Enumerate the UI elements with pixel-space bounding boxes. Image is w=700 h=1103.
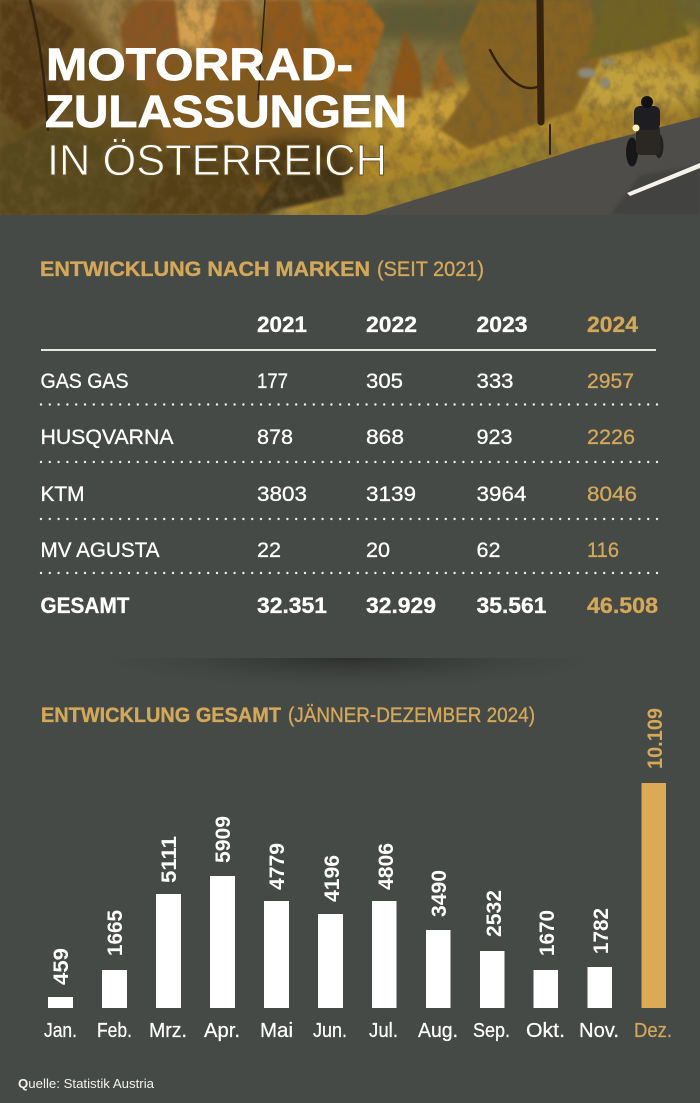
month labels: Sep. — [473, 1020, 510, 1042]
heading: brands: ENTWICKLUNG NACH MARKEN — [40, 258, 370, 281]
section shadow — [70, 658, 630, 692]
row: Gesamt: 32.351 — [257, 593, 327, 618]
row: KTM — [40, 483, 637, 506]
row: MV Agusta: 22 — [257, 539, 281, 562]
brand table — [40, 312, 658, 618]
month labels: Nov. — [579, 1020, 619, 1042]
month labels: Jan. — [44, 1020, 77, 1042]
motorcyclist — [626, 96, 664, 166]
table header years: 2022 — [366, 312, 417, 337]
row: MV Agusta: 62 — [476, 539, 500, 562]
month labels: Okt. — [526, 1020, 565, 1042]
bar values: 3490 — [428, 870, 451, 917]
row: Husqvarna: 2226 — [587, 426, 635, 449]
row: Gas Gas: GAS GAS — [40, 370, 128, 393]
bar values: 1670 — [536, 910, 559, 956]
bar values: 459 — [50, 948, 73, 985]
table header years: 2024 — [587, 312, 639, 337]
row: Gesamt: GESAMT — [40, 593, 130, 618]
bar values: 1665 — [104, 910, 127, 956]
row: KTM: 3964 — [476, 483, 527, 506]
bar values: 1782 — [590, 908, 613, 954]
bar values: 10.109 — [644, 708, 667, 769]
row: KTM: 3139 — [366, 483, 416, 506]
month labels: Dez. — [634, 1020, 672, 1042]
table header years — [257, 312, 639, 337]
road — [365, 117, 700, 215]
row: Gesamt — [40, 593, 658, 618]
month labels: Mrz. — [149, 1020, 187, 1042]
row: Gesamt: 46.508 — [587, 593, 658, 618]
month labels: Feb. — [97, 1020, 132, 1042]
month labels: Jun. — [313, 1020, 347, 1042]
title — [45, 39, 407, 185]
row: Gas Gas: 177 — [257, 370, 288, 393]
bar values: 4779 — [266, 843, 289, 890]
row: Husqvarna: 868 — [366, 426, 404, 449]
source: Quelle: Statistik Austria — [18, 1076, 155, 1091]
bar values: 2532 — [483, 890, 506, 937]
bar values: 5909 — [212, 816, 235, 863]
row: Husqvarna: HUSQVARNA — [40, 426, 174, 449]
month labels: Aug. — [418, 1020, 458, 1042]
heading: total: (JÄNNER-DEZEMBER 2024) — [288, 704, 535, 727]
row: Husqvarna: 923 — [476, 426, 512, 449]
heading: total — [41, 704, 535, 727]
heading: total: ENTWICKLUNG GESAMT — [41, 704, 281, 727]
row: Gas Gas: 333 — [476, 370, 514, 393]
row: Gas Gas: 2957 — [587, 370, 634, 393]
row: Husqvarna — [40, 426, 635, 449]
table header years: 2021 — [257, 312, 307, 337]
rocks — [578, 60, 614, 88]
row: Gesamt: 35.561 — [476, 593, 546, 618]
month labels: Jul. — [369, 1020, 398, 1042]
row: KTM: 8046 — [587, 483, 637, 506]
title: ZULASSUNGEN — [45, 86, 407, 137]
bar values: 4196 — [321, 855, 344, 902]
row: KTM: 3803 — [257, 483, 307, 506]
bar values: 4806 — [375, 843, 398, 890]
row: MV Agusta — [40, 539, 619, 562]
month labels: Apr. — [204, 1020, 240, 1042]
tree trunks — [30, 0, 550, 154]
row: MV Agusta: 20 — [366, 539, 390, 562]
row: Gas Gas — [40, 370, 634, 393]
foliage texture — [0, 0, 700, 215]
heading: brands: (SEIT 2021) — [377, 258, 484, 281]
row: Gas Gas: 305 — [366, 370, 403, 393]
title: IN ÖSTERREICH — [47, 136, 387, 185]
road stripe — [627, 163, 700, 196]
header photo: motorcyclist on an autumn mountain road — [0, 0, 700, 215]
month labels — [44, 1020, 672, 1042]
bars — [48, 783, 666, 1008]
table header years: 2023 — [476, 312, 528, 337]
row: Husqvarna: 878 — [257, 426, 293, 449]
bar values: 5111 — [158, 836, 181, 883]
bar chart: registrations per month 2024 — [44, 708, 672, 1042]
row: Gesamt: 32.929 — [366, 593, 436, 618]
row: MV Agusta: MV AGUSTA — [40, 539, 160, 562]
title: MOTORRAD- — [46, 39, 353, 90]
row: MV Agusta: 116 — [587, 539, 619, 562]
month labels: Mai — [260, 1020, 293, 1042]
bar values — [50, 708, 667, 985]
row: KTM: KTM — [40, 483, 84, 506]
